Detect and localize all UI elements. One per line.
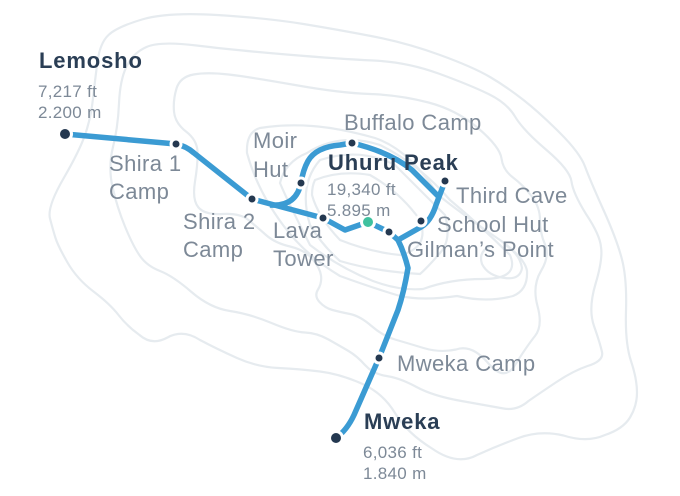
label: Shira 1 Camp (109, 151, 182, 204)
label: Mweka Camp: Mweka Camp (397, 351, 535, 376)
stop: Buffalo Camp (348, 140, 356, 146)
stop: Mweka Camp (376, 354, 382, 362)
stop: Gilman's Point (386, 228, 392, 236)
label: Gilman's Point: Gilman’s Point (407, 237, 554, 262)
stop: Shira 1 Camp (172, 140, 180, 148)
label: Mweka (363, 409, 440, 483)
stop: School Hut (418, 218, 424, 224)
stop: Mweka (331, 433, 341, 443)
stop: Shira 2 Camp (248, 196, 256, 202)
label: Moir Hut: Moir (253, 128, 297, 153)
label: Lemosho: 2.200 m (38, 103, 102, 122)
label: Mweka: 1.840 m (363, 464, 427, 483)
terrain contour lines (50, 14, 637, 459)
label: Lava Tower (273, 218, 334, 271)
label: Third Cave: Third Cave (456, 183, 568, 208)
label: Shira 2 Camp: Shira 2 (183, 209, 256, 234)
label: Moir Hut: Hut (253, 157, 288, 182)
label: Mweka: 6,036 ft (363, 443, 422, 462)
label: Lava Tower: Tower (273, 246, 334, 271)
label: Uhuru Peak: 5.895 m (327, 201, 391, 220)
stop: Third Cave (442, 178, 448, 184)
label: Moir Hut (253, 128, 297, 182)
stop: Uhuru Peak summit (363, 217, 373, 227)
label: Lemosho: Lemosho (39, 48, 143, 73)
label: Lava Tower: Lava (273, 218, 323, 243)
label: Uhuru Peak (327, 150, 459, 220)
label: Mweka: Mweka (364, 409, 440, 434)
stop: Lemosho (60, 129, 70, 139)
label: Lemosho: 7,217 ft (38, 82, 97, 101)
label: Shira 2 Camp: Camp (183, 237, 243, 262)
label: Shira 1 Camp: Camp (109, 179, 169, 204)
label: Lemosho (38, 48, 143, 122)
label: Shira 2 Camp (183, 209, 256, 262)
label: Buffalo Camp: Buffalo Camp (344, 110, 482, 135)
stop halos (57, 126, 452, 446)
label: Uhuru Peak: 19,340 ft (327, 180, 396, 199)
stop: Moir Hut (298, 180, 304, 186)
label: School Hut: School Hut (437, 212, 549, 237)
label: Shira 1 Camp: Shira 1 (109, 151, 182, 176)
label: Uhuru Peak: Uhuru Peak (328, 150, 459, 175)
route line (65, 134, 445, 438)
stop: Lava Tower (320, 214, 326, 222)
